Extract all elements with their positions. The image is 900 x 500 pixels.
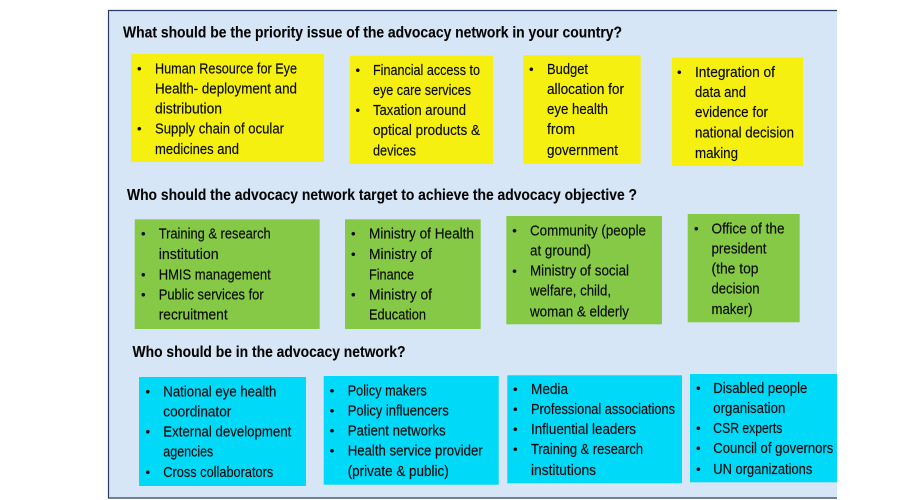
panel: target - community: woman & elderly: [529, 305, 630, 321]
panel: members - policy: Patient networks: [348, 423, 446, 439]
panel: priority issue - financial access: •: [356, 102, 360, 118]
panel: target - institutions: Training & research: [159, 227, 271, 243]
panel: members - other organisations: •: [696, 420, 701, 436]
panel: target - ministries: Education: [369, 307, 426, 323]
panel: target - president: president: [712, 242, 766, 258]
panel: priority issue - budget: [523, 55, 641, 164]
panel: target - ministries: Ministry of: [369, 287, 433, 303]
panel: target - ministries: Finance: [369, 267, 414, 283]
panel: priority issue - human resource: distribution: [155, 102, 222, 118]
panel: target - president: Office of the: [712, 221, 784, 237]
panel: priority issue - budget: allocation for: [547, 82, 624, 98]
panel: members - policy: Policy influencers: [348, 403, 449, 419]
panel: members - policy: •: [330, 403, 335, 418]
heading: priority issue: What should be the priority issue of the advocacy network in your country?: [123, 24, 622, 42]
panel: target - community: •: [512, 264, 517, 278]
panel: target - institutions: [135, 219, 320, 329]
panel: members - other organisations: •: [696, 462, 701, 476]
panel: priority issue - budget: eye health: [547, 102, 608, 118]
panel: priority issue - data integration: data and: [695, 85, 746, 101]
panel: priority issue - data integration: •: [677, 64, 682, 80]
panel: priority issue - budget: from: [547, 122, 575, 138]
panel: target - institutions: •: [141, 287, 146, 302]
panel: members - other organisations: Council of governors: [713, 441, 833, 457]
panel: priority issue - data integration: making: [695, 146, 738, 162]
panel: priority issue - human resource: Health- deployment and: [155, 82, 297, 98]
panel: target - community: •: [512, 223, 517, 238]
panel: priority issue - human resource: medicines and: [155, 142, 239, 158]
panel: target - president: [688, 214, 800, 322]
panel: priority issue - human resource: [131, 54, 324, 162]
panel: members - media: Media: [531, 382, 569, 398]
panel: priority issue - budget: •: [529, 62, 534, 76]
panel: members - coordinators: •: [146, 464, 150, 480]
heading: network members: Who should be in the advocacy network?: [132, 344, 406, 361]
panel: members - coordinators: coordinator: [163, 404, 231, 420]
panel: priority issue - financial access: •: [356, 62, 360, 78]
panel: members - policy: (private & public): [348, 464, 449, 480]
panel: target - president: (the top: [712, 261, 758, 277]
heading: advocacy target: Who should the advocacy network target to achieve the advocacy objective ?: [127, 187, 637, 204]
panel: members - media: •: [513, 382, 518, 396]
panel: target - ministries: Ministry of Health: [369, 227, 474, 243]
panel: members - other organisations: organisation: [713, 401, 785, 417]
panel: target - community: at ground): [530, 244, 591, 260]
panel: priority issue - human resource: •: [137, 61, 142, 76]
panel: priority issue - budget: government: [547, 143, 618, 159]
panel: members - policy: [324, 376, 499, 485]
panel: priority issue - financial access: devices: [373, 144, 416, 160]
panel: members - policy: Health service provider: [348, 444, 483, 460]
panel: members - media: •: [513, 442, 518, 456]
panel: members - media: •: [513, 402, 518, 416]
panel: members - coordinators: Cross collaborators: [163, 465, 273, 481]
panel: members - coordinators: [139, 377, 306, 486]
panel: target - ministries: Ministry of: [369, 247, 433, 263]
panel: members - media: Influential leaders: [531, 422, 636, 438]
panel: priority issue - financial access: optical products &: [373, 123, 480, 139]
panel: priority issue - data integration: evidence for: [695, 105, 768, 121]
panel: members - media: institutions: [531, 463, 596, 479]
panel: priority issue - budget: Budget: [547, 62, 588, 78]
panel: members - coordinators: •: [146, 384, 150, 399]
panel: priority issue - human resource: Supply chain of ocular: [155, 122, 284, 138]
panel: members - media: Professional associations: [531, 402, 675, 418]
panel: target - ministries: •: [351, 287, 356, 302]
panel: target - institutions: HMIS management: [159, 267, 271, 283]
panel: target - community: [506, 216, 662, 324]
panel: target - institutions: •: [141, 226, 146, 241]
panel: target - community: Ministry of social: [530, 264, 629, 280]
panel: priority issue - data integration: national decision: [695, 126, 794, 142]
panel: priority issue - financial access: Financial access to: [373, 63, 480, 79]
panel: members - other organisations: UN organizations: [713, 462, 812, 478]
panel: target - community: Community (people: [530, 224, 646, 240]
panel: members - coordinators: agencies: [163, 444, 213, 460]
panel: members - coordinators: National eye health: [163, 384, 276, 400]
panel: target - community: welfare, child,: [529, 284, 611, 300]
panel: target - ministries: •: [351, 226, 356, 241]
panel: target - ministries: •: [351, 246, 356, 262]
panel: target - president: maker): [712, 302, 752, 318]
panel: members - other organisations: •: [696, 380, 701, 396]
panel: priority issue - financial access: eye care services: [373, 83, 471, 99]
panel: priority issue - financial access: [350, 56, 493, 164]
panel: members - coordinators: •: [146, 424, 150, 439]
panel: target - institutions: Public services for: [159, 287, 264, 303]
panel: target - president: decision: [712, 282, 760, 298]
panel: priority issue - data integration: [672, 57, 803, 166]
panel: target - institutions: •: [141, 267, 146, 282]
panel: members - other organisations: [690, 374, 837, 482]
panel: target - institutions: recruitment: [159, 307, 228, 323]
panel: members - media: Training & research: [531, 442, 643, 458]
panel: members - coordinators: External development: [163, 424, 291, 440]
panel: priority issue - human resource: •: [137, 121, 142, 136]
panel: members - other organisations: CSR experts: [713, 421, 782, 437]
panel: members - policy: •: [330, 383, 335, 398]
panel: priority issue - data integration: Integration of: [695, 65, 776, 81]
panel: members - policy: Policy makers: [348, 383, 427, 399]
main background panel: [108, 10, 837, 498]
panel: members - media: [507, 375, 682, 483]
panel: members - policy: •: [330, 443, 335, 458]
panel: members - other organisations: •: [696, 440, 701, 456]
panel: members - other organisations: Disabled people: [713, 381, 807, 397]
panel: target - ministries: [345, 219, 481, 329]
panel: priority issue - human resource: Human Resource for Eye: [155, 62, 297, 78]
panel: target - president: •: [694, 221, 699, 236]
panel: target - institutions: institution: [159, 247, 219, 263]
panel: members - policy: •: [330, 423, 335, 438]
panel: members - media: •: [513, 422, 518, 436]
panel: priority issue - financial access: Taxation around: [373, 103, 466, 119]
